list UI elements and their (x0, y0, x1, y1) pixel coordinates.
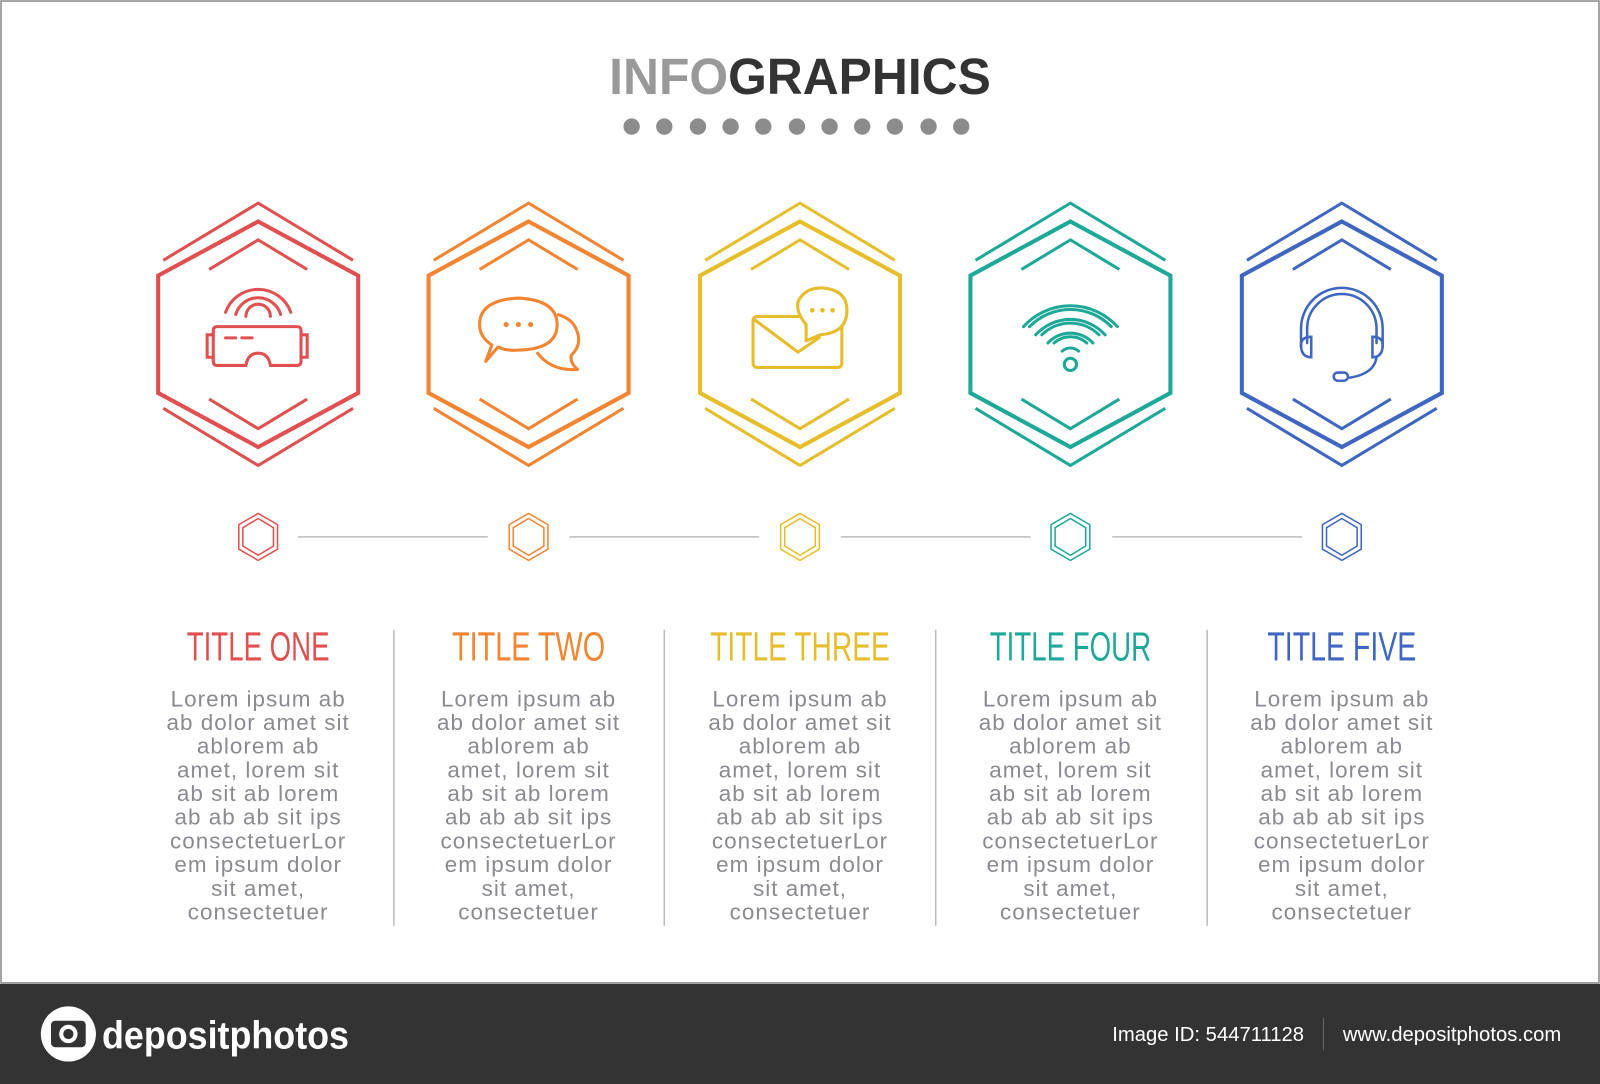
big hexagon 3 (700, 203, 900, 465)
text block 4: consectetuer (1000, 899, 1141, 924)
text block 5: ab ab ab sit ips (1258, 805, 1425, 830)
icon: mail with bubble (753, 288, 847, 367)
text block 3: amet, lorem sit (719, 757, 881, 782)
icon: VR headset (207, 289, 307, 365)
text block 2: Lorem ipsum ab (441, 686, 616, 711)
text block 3: em ipsum dolor (716, 852, 884, 877)
text block 4: amet, lorem sit (989, 757, 1152, 782)
text block 2: consectetuer (458, 899, 599, 924)
text block 1: ab ab ab sit ips (175, 805, 342, 830)
text block 2: amet, lorem sit (447, 757, 610, 782)
small hexagon 1 (239, 513, 278, 560)
footer logo: depositphotos (102, 1014, 349, 1057)
text block 3: sit amet, (753, 876, 847, 901)
big hexagon 2 (429, 203, 629, 465)
text block 2: consectetuerLor (440, 828, 617, 853)
column 2 (429, 203, 629, 669)
heading 3: TITLE THREE (710, 623, 890, 669)
text block 1: amet, lorem sit (177, 757, 339, 782)
icon: headset (1301, 288, 1383, 381)
text block 4: ab sit ab lorem (989, 781, 1152, 806)
text block 2: ab ab ab sit ips (445, 805, 612, 830)
text block 2: ablorem ab (467, 734, 590, 759)
title dots (623, 118, 969, 135)
text block 1: consectetuerLor (170, 828, 346, 853)
text block 5: Lorem ipsum ab (1254, 686, 1429, 711)
title: INFOGRAPHICS (609, 48, 991, 105)
text block 3: Lorem ipsum ab (712, 686, 888, 711)
text block 1: Lorem ipsum ab (171, 686, 346, 711)
footer image id: Image ID: 544711128 (1112, 1024, 1304, 1046)
text block 4: ab ab ab sit ips (987, 805, 1154, 830)
text block 4: em ipsum dolor (987, 852, 1154, 877)
text block 2: ab dolor amet sit (437, 710, 620, 735)
heading 5: TITLE FIVE (1267, 623, 1416, 669)
text block 4: sit amet, (1023, 876, 1117, 901)
text block 3: consectetuer (730, 899, 870, 924)
heading 1: TITLE ONE (187, 623, 330, 669)
column 3 (700, 203, 900, 669)
text block 1: ab sit ab lorem (177, 781, 339, 806)
text block 1: ablorem ab (197, 734, 319, 759)
text block 5: consectetuerLor (1254, 828, 1430, 853)
text block 1: em ipsum dolor (174, 852, 342, 877)
text block 3: ab dolor amet sit (708, 710, 892, 735)
small hexagon 2 (509, 513, 548, 560)
timeline connectors (298, 536, 1302, 538)
text block 3: consectetuerLor (712, 828, 888, 853)
text block 3: ablorem ab (739, 734, 861, 759)
icon: wifi (1023, 306, 1117, 371)
text block 4: ablorem ab (1009, 734, 1132, 759)
small hexagon 3 (781, 513, 819, 560)
text block 5: ab dolor amet sit (1250, 710, 1433, 735)
icon: chat bubbles (480, 298, 579, 370)
body texts (167, 686, 1433, 924)
column 4 (970, 203, 1170, 669)
text block 4: ab dolor amet sit (979, 710, 1162, 735)
text block 1: sit amet, (211, 876, 305, 901)
big hexagon 1 (158, 203, 358, 465)
big hexagon 4 (970, 203, 1170, 465)
dividers (394, 630, 1207, 926)
footer url: www.depositphotos.com (1342, 1024, 1561, 1046)
text block 1: ab dolor amet sit (167, 710, 350, 735)
text block 3: ab sit ab lorem (719, 781, 881, 806)
heading 4: TITLE FOUR (990, 623, 1151, 669)
text block 1: consectetuer (188, 899, 329, 924)
text block 4: Lorem ipsum ab (983, 686, 1158, 711)
column 5 (1242, 203, 1442, 669)
text block 4: consectetuerLor (982, 828, 1159, 853)
text block 2: em ipsum dolor (445, 852, 612, 877)
text block 5: ab sit ab lorem (1261, 781, 1423, 806)
column 1 (158, 203, 358, 669)
text block 3: ab ab ab sit ips (716, 805, 884, 830)
text block 5: amet, lorem sit (1261, 757, 1423, 782)
text block 5: consectetuer (1271, 899, 1412, 924)
heading 2: TITLE TWO (452, 623, 605, 669)
big hexagon 5 (1242, 203, 1442, 465)
text block 2: ab sit ab lorem (447, 781, 610, 806)
footer logo (41, 1006, 349, 1062)
footer bar (0, 984, 1600, 1084)
text block 2: sit amet, (482, 876, 576, 901)
small hexagon 5 (1322, 513, 1361, 560)
text block 5: em ipsum dolor (1258, 852, 1426, 877)
text block 5: sit amet, (1295, 876, 1389, 901)
text block 5: ablorem ab (1281, 734, 1403, 759)
small hexagon 4 (1051, 513, 1090, 560)
